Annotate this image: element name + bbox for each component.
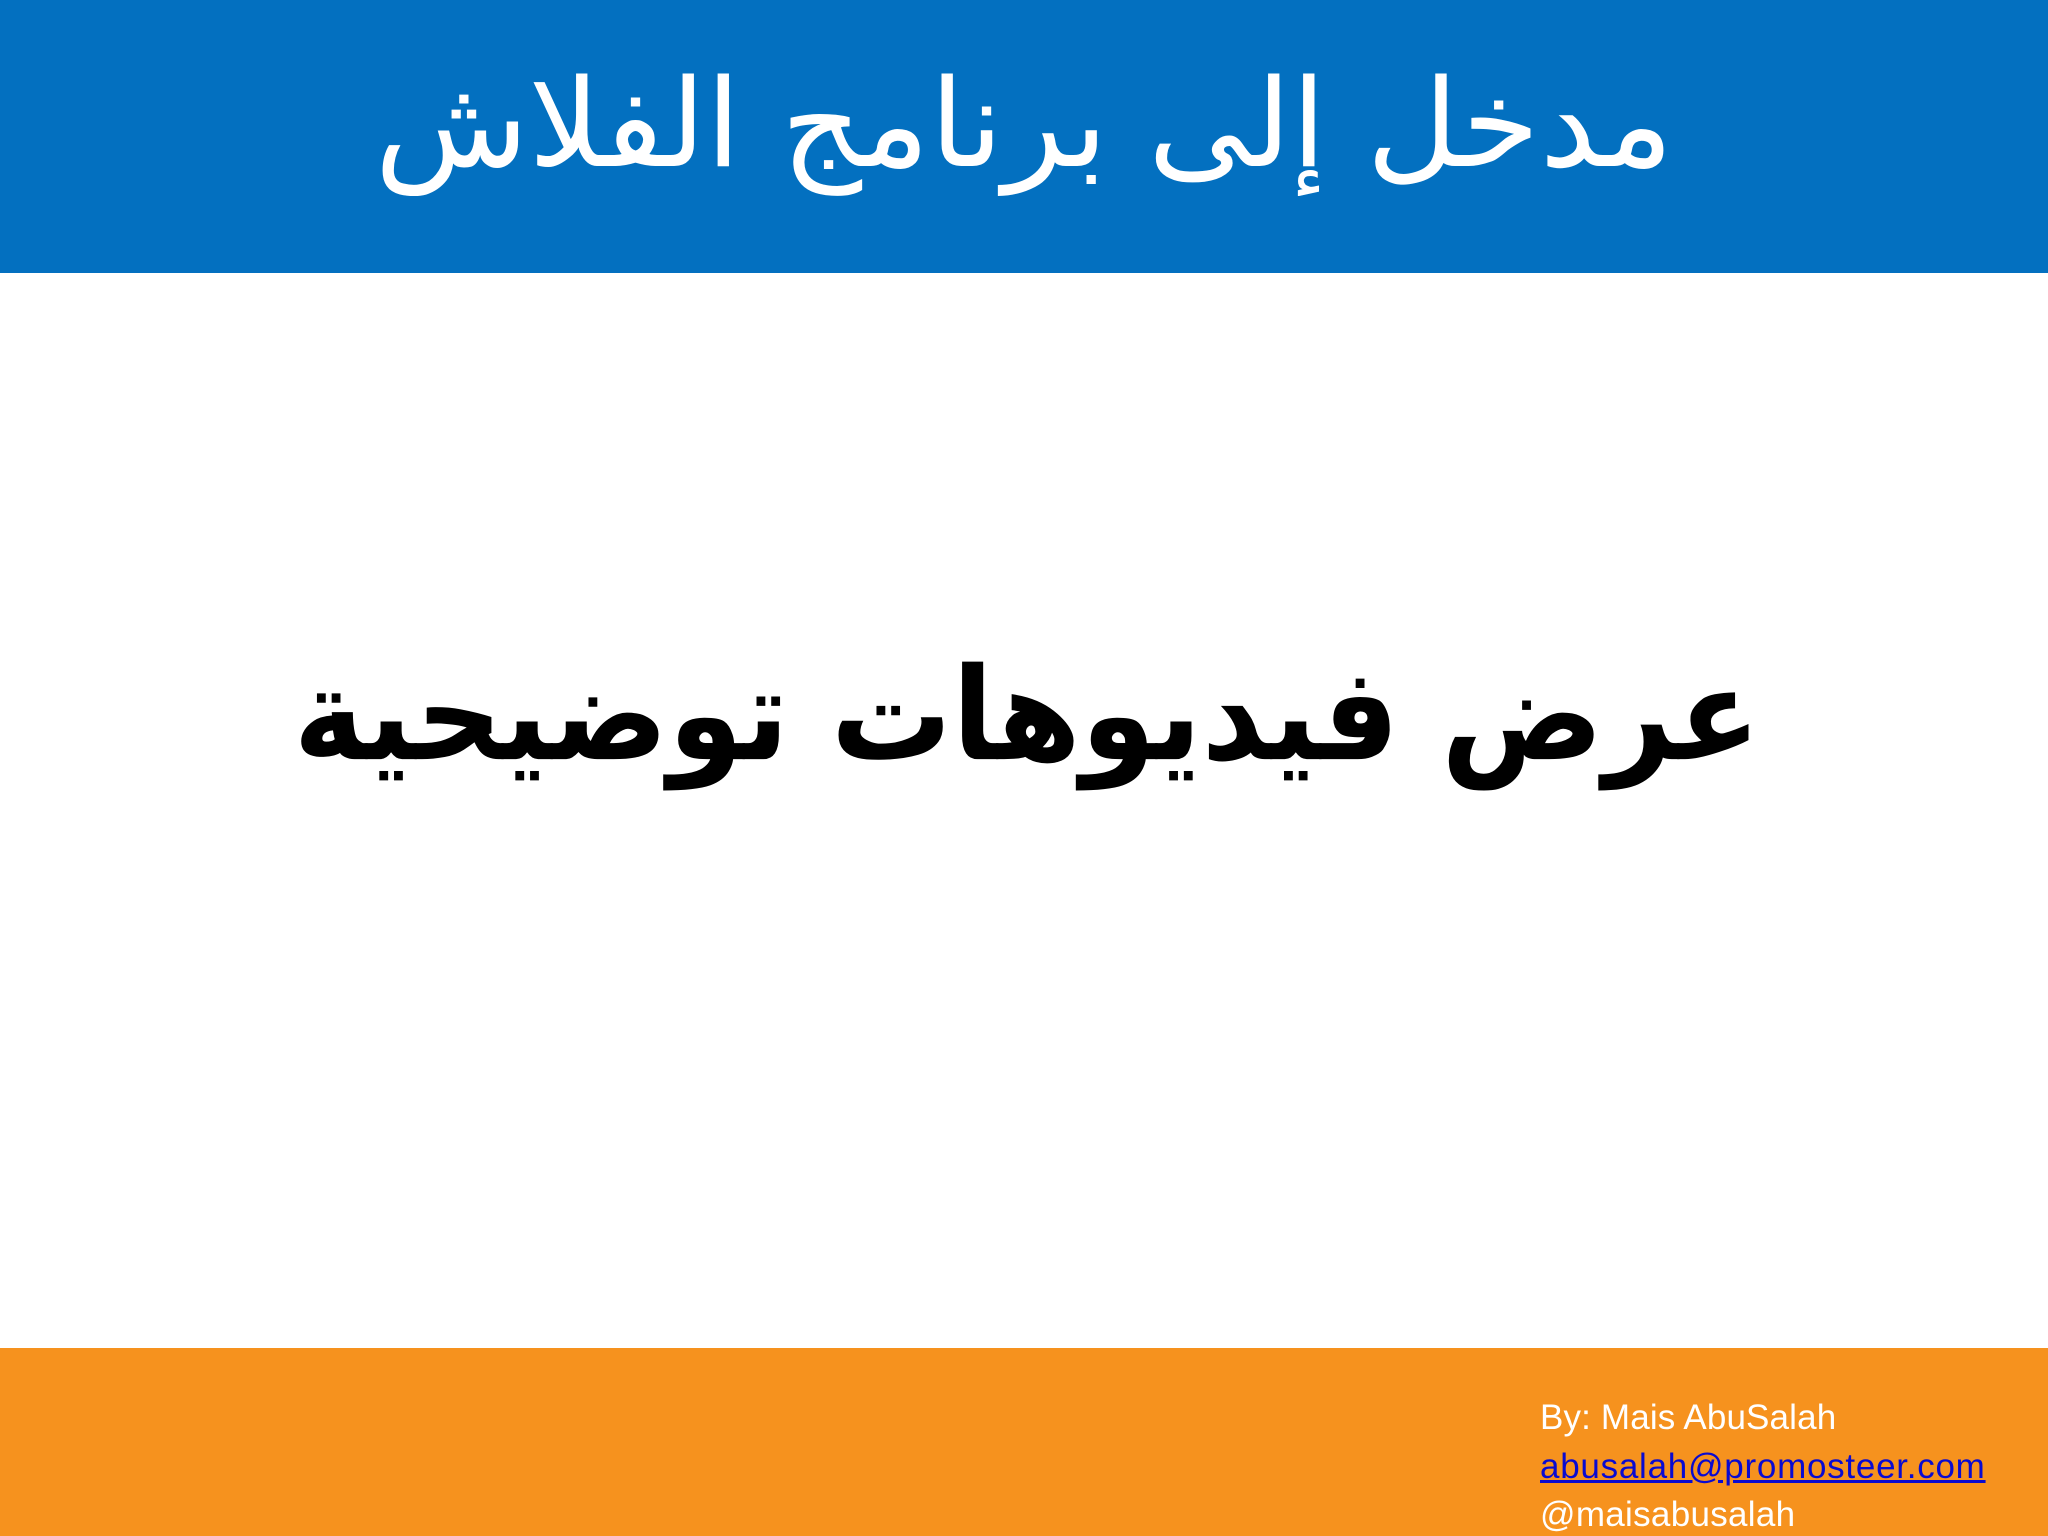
author handle: @maisabusalah xyxy=(1540,1495,1795,1534)
main heading: عرض فيديوهات توضيحية xyxy=(293,641,1761,790)
footer band xyxy=(0,1348,2048,1536)
author name: By: Mais AbuSalah xyxy=(1540,1398,1836,1437)
author email: abusalah@promosteer.com xyxy=(1540,1447,1986,1486)
title: مدخل إلى برنامج الفلاش xyxy=(375,53,1673,195)
header band with title xyxy=(0,0,2048,273)
